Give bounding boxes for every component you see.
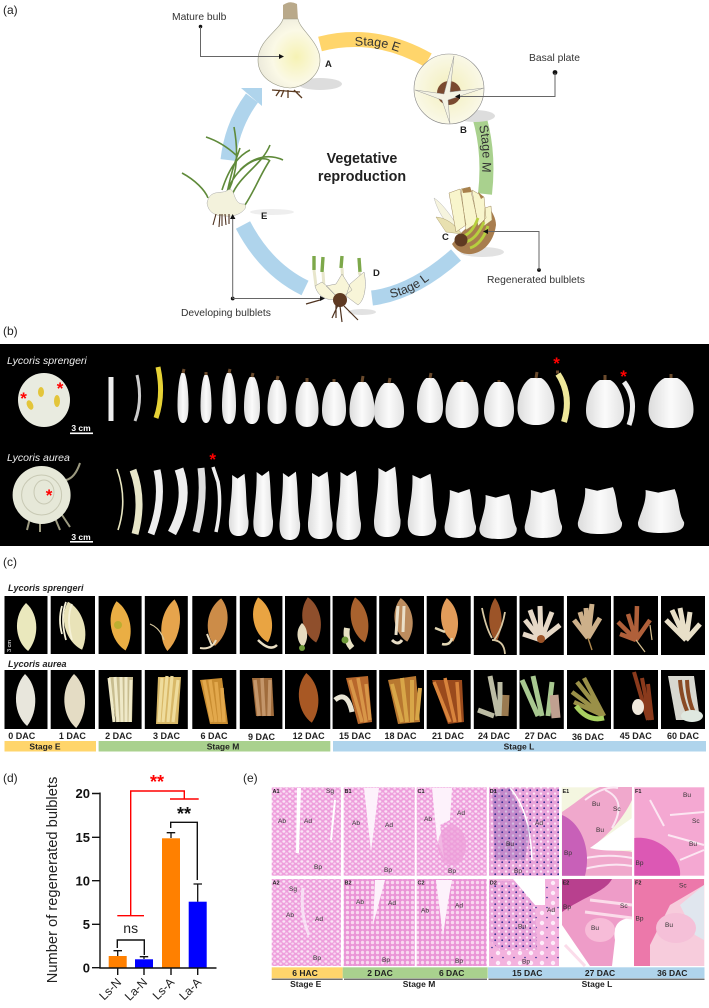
- micrograph D1: Bu: [506, 841, 514, 848]
- x tick labels: [96, 975, 204, 1004]
- micrograph B2: B2: [344, 880, 352, 886]
- panel label (c): (c): [3, 555, 17, 569]
- micrograph D2: Ad: [547, 907, 555, 914]
- day labels: 18 DAC: [384, 731, 417, 741]
- letter B: B: [460, 125, 467, 136]
- micrograph E2: Bu: [591, 925, 599, 932]
- day labels: 36 DAC: [572, 732, 605, 742]
- x tick labels: La-N: [122, 975, 150, 1004]
- red asterisks: *: [209, 450, 216, 469]
- letter E: E: [261, 211, 267, 222]
- callout: Basal plate: [455, 53, 580, 99]
- arc: Stage M: [473, 120, 494, 195]
- day labels: 0 DAC: [8, 731, 36, 741]
- micrograph B2: [344, 879, 415, 966]
- arc: Stage E: Stage E: [356, 36, 401, 52]
- day labels: 12 DAC: [293, 731, 325, 741]
- micrograph A2: Sg: [289, 886, 297, 893]
- micrograph F2: F2: [635, 880, 641, 886]
- error bars: [114, 833, 202, 959]
- species label: Lycoris sprengeri: Lycoris sprengeri: [7, 355, 87, 367]
- micrograph A2: Ab: [286, 912, 294, 919]
- title: Vegetative reproduction: reproduction: [318, 169, 406, 185]
- micrograph A2: Bp: [313, 955, 321, 962]
- micrograph D1: D1: [490, 789, 497, 795]
- day labels: 60 DAC: [667, 731, 700, 741]
- micrograph F2: Bu: [665, 922, 673, 929]
- scale label 3 cm: 3 cm: [7, 640, 13, 652]
- scales row: L. sprengeri: [108, 367, 694, 428]
- band: 15, 27 and 36 DAC: 27 DAC: [585, 968, 615, 978]
- panel label (b): (b): [3, 324, 18, 338]
- micrograph F2: [634, 879, 704, 966]
- red asterisks: *: [46, 486, 53, 505]
- day labels: 1 DAC: [59, 731, 86, 741]
- bracket: red significance: [117, 772, 199, 916]
- arc: Stage L: [371, 250, 461, 306]
- scale bar: L. sprengeri: 3 cm: [71, 423, 91, 433]
- red asterisks: *: [20, 389, 27, 408]
- micrograph F2: Bp: [636, 916, 644, 922]
- panel: (a) vegetative reproduction cycle: [3, 2, 585, 322]
- band: 6 HAC: [272, 967, 343, 978]
- day labels: 9 DAC: [248, 732, 275, 742]
- panel: (d) bar chart: [45, 772, 216, 1004]
- micrograph E2: [562, 879, 632, 966]
- letter D: D: [373, 268, 380, 279]
- bracket: ns: ns: [123, 920, 138, 936]
- micrograph D1: [489, 787, 559, 876]
- band: 15, 27 and 36 DAC: 36 DAC: [657, 968, 687, 978]
- bracket: red significance: **: [150, 772, 164, 792]
- day labels: 45 DAC: [620, 731, 652, 741]
- red asterisks: *: [553, 354, 560, 373]
- micrograph F1: Bp: [636, 860, 644, 867]
- x tick labels: Ls-N: [96, 975, 124, 1003]
- bars: [109, 838, 207, 968]
- day labels: 2 DAC: [105, 731, 133, 741]
- band: 2 DAC and 6 DAC: 2 DAC: [367, 968, 393, 978]
- micrograph B1: B1: [344, 789, 352, 795]
- band: 6 HAC: 6 HAC: [292, 968, 318, 978]
- species label: Lycoris sprengeri: Lycoris sprengeri: [8, 583, 84, 593]
- micrograph C2: C2: [418, 880, 425, 886]
- callout: Mature bulb: Mature bulb: [172, 12, 227, 23]
- arrow: E to A: [228, 88, 262, 160]
- day labels: 21 DAC: [432, 731, 465, 741]
- bulb cross-section: L. aurea: [13, 463, 80, 532]
- y tick labels: [76, 786, 90, 976]
- band: Stage E: Stage E: [29, 742, 61, 752]
- micrograph A1: Ad: [304, 818, 312, 825]
- micrograph B1: Ad: [385, 822, 393, 829]
- micrograph B1: Bp: [384, 867, 392, 874]
- micrograph C2: Bp: [455, 958, 463, 965]
- micrograph F1: F1: [635, 789, 641, 795]
- band: 2 DAC and 6 DAC: 6 DAC: [439, 968, 464, 978]
- micrograph B1: [344, 787, 415, 876]
- callout: Basal plate: Basal plate: [529, 53, 580, 64]
- micrograph C1: Bp: [448, 868, 456, 875]
- letter C: C: [442, 232, 449, 243]
- micrograph B1: Ab: [352, 820, 360, 827]
- micrograph C2: [417, 879, 487, 966]
- micrograph D1: Bp: [514, 868, 522, 875]
- bulb cross-section: L. sprengeri: [18, 373, 70, 427]
- y tick labels: 0: [83, 960, 90, 976]
- micrograph D2: D2: [490, 880, 497, 886]
- micrograph A1: A1: [272, 789, 280, 795]
- micrograph A2: A2: [272, 880, 280, 886]
- callout: Regenerated bulblets: [483, 229, 585, 286]
- day labels: 15 DAC: [339, 731, 372, 741]
- micrograph B2: Ab: [356, 899, 364, 906]
- micrograph C1: Ab: [424, 816, 432, 823]
- stage label: Stage E: [272, 979, 343, 989]
- icon: young plant E: [182, 127, 294, 227]
- stage label: Stage E: Stage E: [290, 979, 322, 989]
- micrograph A1: Bp: [314, 864, 322, 871]
- x tick labels: Ls-A: [150, 975, 177, 1003]
- scales row: L. aurea: [117, 467, 684, 540]
- panel: (b) scale dissection photographs: [0, 344, 709, 546]
- band: 2 DAC and 6 DAC: [343, 967, 488, 978]
- scale bar: L. aurea: 3 cm: [71, 532, 91, 542]
- panel: (e) histology micrographs: [272, 787, 704, 989]
- micrograph D1: Ad: [535, 820, 543, 827]
- photos: row 1: [4, 596, 705, 655]
- panel label (d): (d): [3, 771, 18, 785]
- band: Stage M: [99, 741, 330, 752]
- title: Vegetative reproduction: Vegetative: [327, 151, 397, 167]
- band: Stage L: [333, 741, 706, 752]
- arrow: D to E: [243, 225, 305, 288]
- day labels: [8, 731, 700, 742]
- micrograph A1: [272, 787, 341, 876]
- micrograph A1: Sg: [326, 788, 334, 795]
- band: 15, 27 and 36 DAC: [488, 967, 704, 978]
- band: Stage L: Stage L: [504, 742, 534, 752]
- band: Stage E: [4, 741, 96, 752]
- x tick labels: La-A: [176, 975, 204, 1003]
- icon: cut bulb C: [434, 187, 504, 257]
- arc: Stage M: Stage M: [480, 126, 492, 172]
- icon: bulblets D: [306, 256, 376, 322]
- arc: Stage E: [318, 32, 432, 66]
- micrograph F1: Bu: [689, 841, 697, 848]
- micrograph F1: [634, 787, 704, 876]
- day labels: 24 DAC: [478, 731, 511, 741]
- red asterisks: *: [57, 379, 64, 398]
- panel: (c) time-series photographs: [4, 583, 706, 752]
- bracket: black significance: [171, 804, 197, 880]
- callout: Developing bulblets: Developing bulblets: [181, 308, 271, 319]
- stage label: Stage L: Stage L: [582, 979, 612, 989]
- band: Stage M: Stage M: [207, 742, 239, 752]
- stage label: Stage M: Stage M: [403, 979, 435, 989]
- bracket: black significance: **: [177, 804, 191, 824]
- micrograph E2: E2: [562, 880, 569, 886]
- arc: Stage L: Stage L: [390, 276, 430, 298]
- y tick labels: 20: [76, 786, 90, 801]
- icon: basal plate bulb B: [414, 54, 495, 124]
- species label: Lycoris aurea: Lycoris aurea: [8, 659, 67, 669]
- micrograph E1: Bp: [564, 850, 572, 857]
- micrograph E2: Sc: [620, 903, 628, 910]
- micrograph A2: [272, 879, 341, 966]
- micrograph E1: [562, 787, 632, 876]
- micrograph F2: Sc: [679, 882, 687, 890]
- callout: Developing bulblets: [181, 214, 325, 319]
- y tick labels: 10: [76, 874, 90, 888]
- micrograph C1: C1: [418, 789, 425, 795]
- micrograph C2: Ad: [455, 902, 463, 910]
- y tick labels: 5: [83, 917, 90, 932]
- micrograph C1: Ad: [457, 810, 465, 817]
- micrograph F1: Sc: [692, 818, 700, 825]
- band: 15, 27 and 36 DAC: 15 DAC: [512, 968, 542, 978]
- callout: Mature bulb: [172, 12, 284, 59]
- micrograph A2: Ad: [315, 916, 323, 923]
- micrograph E2: Bp: [563, 904, 571, 911]
- micrograph D2: [489, 879, 559, 966]
- red asterisks: *: [620, 367, 627, 386]
- letter A: A: [325, 59, 332, 70]
- micrograph F1: Bu: [683, 792, 691, 799]
- micrograph E1: Bu: [596, 827, 604, 834]
- axes: [92, 792, 216, 975]
- micrograph E1: Bu: [592, 801, 600, 808]
- day labels: 3 DAC: [153, 731, 180, 741]
- day labels: 27 DAC: [525, 731, 557, 741]
- y axis title: Number of regenerated bulblets: [45, 777, 61, 983]
- panel label (e): (e): [243, 771, 258, 785]
- micrograph E1: E1: [562, 789, 569, 795]
- photo background: [0, 344, 709, 546]
- micrograph B2: Bp: [382, 957, 390, 964]
- species label: Lycoris aurea: Lycoris aurea: [7, 452, 70, 464]
- micrograph B2: Ad: [388, 900, 396, 907]
- micrograph E1: Sc: [613, 806, 621, 813]
- red asterisks: [20, 354, 627, 505]
- micrograph C2: Ab: [421, 908, 429, 914]
- callout: Regenerated bulblets: Regenerated bulblets: [487, 275, 585, 286]
- title: Vegetative reproduction: [318, 151, 406, 185]
- day labels: 6 DAC: [200, 731, 228, 741]
- micrograph C1: [417, 787, 487, 876]
- y tick labels: 15: [76, 830, 90, 845]
- photos: row 2: [4, 670, 705, 729]
- micrograph D2: Bp: [522, 958, 530, 966]
- icon: mature bulb A: [258, 2, 342, 98]
- micrograph D2: Bu: [518, 924, 526, 930]
- bracket: ns: [117, 920, 144, 955]
- panel label (a): (a): [3, 3, 18, 17]
- micrograph A1: Ab: [278, 818, 286, 825]
